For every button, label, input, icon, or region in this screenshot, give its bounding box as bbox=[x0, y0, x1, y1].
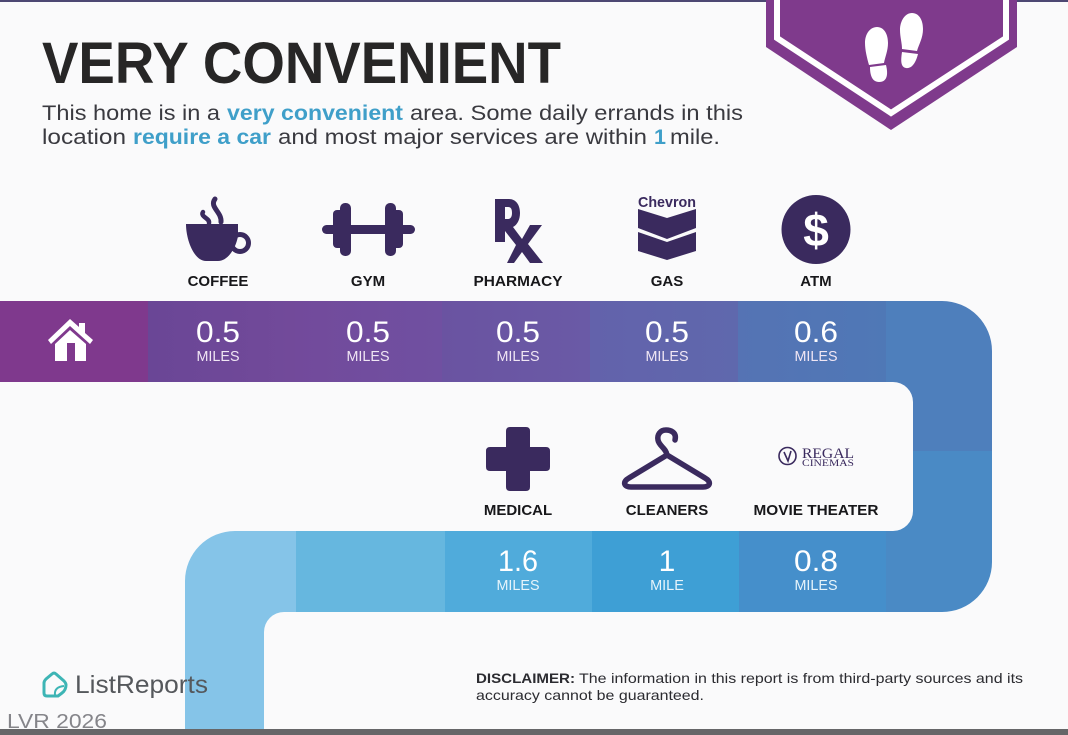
icon: house bbox=[48, 319, 93, 361]
icon: gym bbox=[322, 203, 415, 256]
icon: footprints bbox=[865, 13, 923, 82]
distance: atm bbox=[794, 316, 838, 365]
distance: cleaners: 1 bbox=[659, 545, 675, 578]
distance: gas bbox=[645, 316, 689, 365]
ListReports logo: ListReports bbox=[75, 671, 208, 699]
distance: pharmacy bbox=[496, 316, 540, 365]
distance: gym bbox=[346, 316, 390, 365]
distance: movie theater: MILES bbox=[794, 578, 838, 594]
icon: Regal Cinemas logo: REGAL bbox=[802, 446, 854, 462]
icon: pharmacy Rx bbox=[495, 199, 543, 263]
intro text: mile. bbox=[670, 125, 720, 149]
icon: Regal Cinemas logo: CINEMAS bbox=[802, 459, 854, 469]
distance: pharmacy: MILES bbox=[496, 349, 540, 365]
icon: dollar coin bbox=[782, 195, 850, 264]
route band bbox=[0, 301, 992, 729]
icon: medical cross bbox=[486, 427, 550, 491]
icon: Chevron logo: Chevron bbox=[638, 194, 696, 211]
label: pharmacy: PHARMACY bbox=[474, 273, 562, 290]
disclaimer: The information in this report is from third-party sources and its bbox=[579, 670, 1023, 686]
distance: coffee bbox=[196, 316, 240, 365]
intro text: very convenient bbox=[227, 101, 403, 125]
icon: dollar coin: $ bbox=[803, 204, 829, 256]
label: gas: GAS bbox=[651, 273, 683, 290]
watermark: LVR 2026 bbox=[7, 710, 107, 733]
icon: coffee bbox=[186, 199, 248, 261]
distance: gas: MILES bbox=[646, 349, 688, 365]
left bend bbox=[185, 531, 296, 729]
intro text: 1 bbox=[654, 125, 666, 149]
label: cleaners: CLEANERS bbox=[626, 502, 708, 519]
disclaimer: accuracy cannot be guaranteed. bbox=[476, 687, 704, 703]
distance: coffee: MILES bbox=[196, 349, 240, 365]
top row segments bbox=[0, 301, 148, 382]
icon: Chevron logo bbox=[638, 194, 696, 260]
intro text bbox=[42, 101, 743, 149]
distance: gym: MILES bbox=[346, 349, 390, 365]
intro text: This home is in a bbox=[42, 101, 220, 125]
disclaimer bbox=[476, 670, 1023, 703]
intro text: require a car bbox=[133, 125, 272, 149]
title: VERY CONVENIENT bbox=[42, 31, 561, 96]
icon: Regal Cinemas logo bbox=[779, 446, 854, 469]
distance: coffee: 0.5 bbox=[196, 316, 240, 349]
distance: movie theater bbox=[794, 545, 838, 594]
disclaimer: DISCLAIMER: bbox=[476, 670, 575, 686]
distance: gym: 0.5 bbox=[346, 316, 390, 349]
distance: movie theater: 0.8 bbox=[794, 545, 838, 578]
intro text: and most major services are within bbox=[278, 125, 647, 149]
distance: medical: 1.6 bbox=[498, 545, 538, 578]
distance: gas: 0.5 bbox=[645, 316, 689, 349]
label: atm: ATM bbox=[800, 273, 832, 290]
label: movie theater: MOVIE THEATER bbox=[754, 502, 879, 519]
distance: cleaners: MILE bbox=[650, 578, 684, 594]
label: medical: MEDICAL bbox=[484, 502, 552, 519]
distance: pharmacy: 0.5 bbox=[496, 316, 540, 349]
distance: atm: 0.6 bbox=[794, 316, 838, 349]
distance: medical bbox=[496, 545, 540, 594]
bottom row segments bbox=[739, 531, 886, 612]
walk score badge bbox=[766, 0, 1017, 130]
label: coffee: COFFEE bbox=[188, 273, 248, 290]
icon: hanger bbox=[625, 430, 709, 487]
distance: atm: MILES bbox=[794, 349, 838, 365]
distance: medical: MILES bbox=[496, 578, 540, 594]
intro text: area. Some daily errands in this bbox=[410, 101, 743, 125]
label: gym: GYM bbox=[351, 273, 385, 290]
right bend bbox=[886, 301, 992, 451]
intro text: location bbox=[42, 125, 126, 149]
distance: cleaners bbox=[650, 545, 684, 594]
